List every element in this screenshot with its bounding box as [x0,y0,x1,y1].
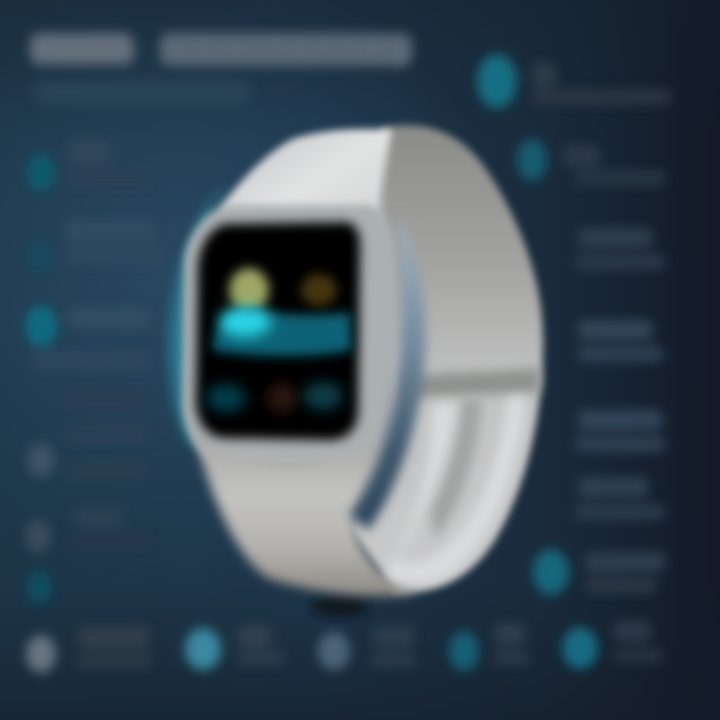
left item 1 [27,140,149,192]
bottom item 2 [185,625,284,670]
bottom row: icons and labels [26,620,663,673]
screen: yellow sun [229,268,269,312]
left item 2 [28,220,165,272]
left item 3 [25,305,152,370]
bottom item 5 [562,620,663,669]
bottom item 3 [318,625,416,670]
subtitle [35,82,250,104]
right item 3 [575,228,665,270]
top strap [222,129,392,240]
back band [350,125,543,592]
inner blue band [350,215,426,530]
title: Monitoring [160,30,410,67]
watch case [182,205,396,470]
left column: icons and labels [25,140,165,604]
screen: cyan highlight [219,307,271,337]
left item 5 [27,443,146,478]
title [30,30,412,67]
watch shadow [312,596,368,616]
watch glow [170,185,225,445]
left item 4 [65,390,150,443]
right lower strap highlight [385,396,526,583]
right item 4 [578,320,663,362]
right column: icons and labels [477,54,670,595]
bottom item 4 [449,623,529,671]
right item 2 [517,139,665,186]
right item 7 [533,549,665,595]
screen [196,222,360,440]
left item 7 [26,570,52,604]
band seam [405,368,540,398]
right item 5 [575,410,665,452]
screen: bottom centre metric [267,383,297,413]
bottom strap [194,430,420,596]
right item 1 [477,54,670,108]
screen: cyan chart wave [212,310,352,356]
left item 6 [25,507,150,553]
smartwatch [170,125,543,616]
lower band gray centre stripe [430,398,482,540]
screen: bottom left metric [206,384,246,412]
screen: bottom right metric [303,382,343,410]
bottom item 1 [26,626,152,673]
screen: amber sun [301,274,337,306]
title: Health [30,30,131,67]
right item 6 [575,477,665,520]
